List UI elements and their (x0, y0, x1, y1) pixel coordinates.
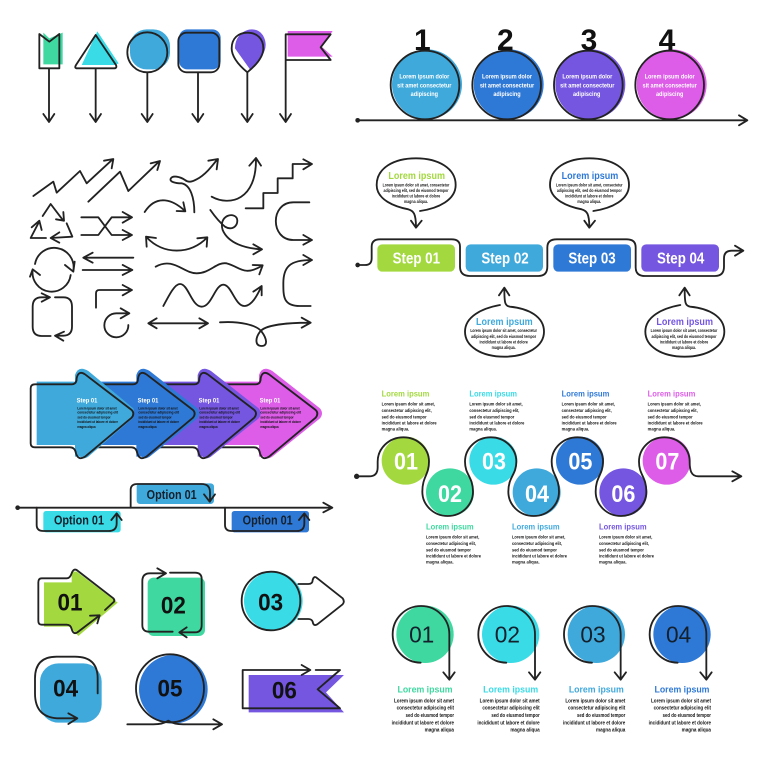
bubble: step 04: Lorem ipsum dolor sit amet, consectetur (651, 328, 718, 333)
badge 06 ribbon: 06 (272, 677, 297, 704)
item 4: sit amet consectetur (642, 82, 697, 89)
step 04 (641, 244, 719, 272)
badge 03 circle arrow (242, 572, 344, 630)
item 4 (635, 24, 707, 119)
item 03: 03 (580, 622, 606, 648)
arrow: recycle triangle (31, 204, 72, 243)
text 03: Lorem ipsum dolor sit amet, (469, 402, 523, 407)
arrow step texts: incididunt ut labore et dolore (138, 420, 179, 424)
bubble: step 02: Lorem ipsum (476, 317, 533, 328)
bubble: step 01 (377, 158, 456, 228)
item 1: sit amet consectetur (397, 82, 452, 89)
text 04: Lorem ipsum dolor sit amet, (512, 535, 565, 540)
bubble: step 03 (550, 158, 629, 228)
option bottom left (37, 508, 122, 532)
panel: snake timeline 01-07 (354, 390, 741, 565)
bubble: step 02: magna aliqua. (492, 345, 516, 350)
text 03: consectetur adipiscing elit, (469, 408, 519, 413)
arrow: zigzag one (33, 159, 113, 196)
text 01: sed do eiusmod tempor (382, 414, 427, 419)
arrow: opposite straight (83, 253, 133, 275)
arrow: circular (30, 248, 75, 292)
option bottom right: Option 01 (243, 512, 293, 527)
panel: step process with speech bubbles (355, 158, 743, 357)
bubble: step 02: Lorem ipsum dolor sit amet, consectetur (470, 328, 537, 333)
arrow step texts: magna aliqua (77, 425, 96, 429)
snake line (354, 437, 741, 516)
badge 03 circle arrow: 03 (258, 589, 283, 616)
item 02: magna aliqua (510, 727, 540, 733)
item 3: adipiscing (573, 91, 600, 98)
text 06: consectetur adipiscing elit, (599, 541, 649, 546)
badge 05 circle (127, 654, 222, 729)
badge 02 square (142, 568, 205, 637)
text 02: Lorem ipsum (426, 522, 474, 531)
arrow step texts: sed do eiusmod tempor (199, 415, 233, 419)
text 01: incididunt ut labore et dolore (382, 420, 437, 425)
arrow: square rotate (33, 293, 72, 341)
item 3: Lorem ipsum dolor (562, 73, 613, 80)
text 02: Lorem ipsum dolor sit amet, (426, 535, 479, 540)
arrow: double headed (148, 318, 208, 328)
text 06: Lorem ipsum (599, 522, 647, 531)
arrow step texts: consectetur adipiscing elit (260, 411, 302, 415)
arrow: circle return (104, 308, 129, 337)
panel: numbered circles timeline (355, 24, 747, 125)
arrow step texts: sed do eiusmod tempor (260, 415, 294, 419)
item 03: Lorem ipsum dolor sit amet (565, 698, 626, 704)
text 04: Lorem ipsum (512, 522, 560, 531)
text 01: consectetur adipiscing elit, (382, 408, 432, 413)
badge 05 circle: 05 (157, 676, 182, 703)
text 07: Lorem ipsum dolor sit amet, (648, 402, 701, 407)
text 05: consectetur adipiscing elit, (562, 408, 612, 413)
pin: rounded square (178, 29, 221, 122)
step 01: Step 01 (393, 250, 440, 267)
item 03: magna aliqua (596, 727, 625, 733)
item 02: 02 (495, 622, 520, 648)
pin: triangle (75, 31, 119, 122)
arrow: crossing (81, 212, 132, 240)
item 04: Lorem ipsum (654, 685, 709, 695)
item 01: Lorem ipsum (397, 685, 452, 695)
item 03: incididunt ut labore et dolore (563, 720, 625, 726)
text 02: sed do eiusmod tempor (426, 547, 471, 552)
item 2 (472, 24, 544, 119)
step 03 (553, 244, 631, 272)
arrow step texts: magna aliqua (199, 425, 218, 429)
text 07: sed do eiusmod tempor (648, 414, 693, 419)
step 03: Step 03 (568, 250, 616, 267)
text 03: Lorem ipsum (469, 390, 517, 399)
badge 01 arrow: 01 (57, 589, 82, 616)
bubble: step 04: adipiscing elit, sed do eiusmod tempor (651, 334, 717, 339)
arrow step texts: Step 01 (199, 399, 220, 405)
arrow: loop up (170, 159, 218, 212)
item 04 (649, 606, 712, 733)
pin: banner (39, 33, 63, 122)
item 01: Lorem ipsum dolor sit amet (394, 698, 454, 704)
step 01 (377, 244, 455, 272)
text 06: Lorem ipsum dolor sit amet, (599, 535, 652, 540)
item 01 (392, 606, 455, 733)
text 04: incididunt ut labore et dolore (512, 553, 567, 558)
text 03: magna aliqua. (469, 427, 497, 432)
option bottom left: Option 01 (54, 512, 104, 527)
arrow step 2 (98, 369, 199, 458)
arrow step texts: incididunt ut labore et dolore (77, 420, 118, 424)
bubble: step 04: Lorem ipsum (656, 317, 713, 328)
item 03: Lorem ipsum (569, 685, 624, 695)
item 03 (563, 606, 626, 733)
arrow: short curve (145, 200, 185, 212)
text 01: Lorem ipsum (382, 390, 429, 399)
panel: options timeline (15, 483, 332, 532)
item 2: adipiscing (493, 91, 521, 98)
text 07: Lorem ipsum (648, 390, 695, 399)
text 05: incididunt ut labore et dolore (562, 420, 617, 425)
arrow step texts: Step 01 (138, 399, 159, 405)
text 07 (648, 390, 703, 432)
text 02: consectetur adipiscing elit, (426, 541, 476, 546)
bubble: step 04 (645, 288, 724, 357)
badge 02 square: 02 (161, 593, 186, 620)
text 04: consectetur adipiscing elit, (512, 541, 562, 546)
item 3 (554, 24, 625, 119)
arrow: bend (96, 285, 132, 308)
step 02 (466, 244, 543, 272)
text 02: incididunt ut labore et dolore (426, 553, 481, 558)
item 02: sed do eiusmod tempor (491, 713, 540, 719)
pin: circle (127, 29, 170, 122)
panel: numbered circles with text (392, 606, 712, 733)
bubble: step 02: incididunt ut labore et dolore (479, 339, 528, 344)
bubble: step 01: Lorem ipsum (388, 171, 445, 182)
item 2: Lorem ipsum dolor (482, 73, 532, 80)
text 05 (562, 390, 617, 432)
circles with numbers: 06 (611, 481, 635, 508)
arrow step texts: consectetur adipiscing elit (199, 411, 241, 415)
item 03: consectetur adipiscing elit (568, 706, 626, 712)
arrow step texts: magna aliqua (138, 425, 157, 429)
badge 06 ribbon (243, 665, 344, 712)
text 07: consectetur adipiscing elit, (648, 408, 698, 413)
item 01: sed do eiusmod tempor (406, 713, 454, 719)
item 1: adipiscing (411, 91, 438, 98)
item 3: 3 (581, 24, 597, 57)
step connector line (355, 239, 743, 276)
pin: balloon (232, 29, 266, 122)
item 1: Lorem ipsum dolor (399, 73, 450, 80)
arrow step texts: Lorem ipsum dolor sit amet (199, 406, 239, 410)
arrow step texts: sed do eiusmod tempor (77, 415, 111, 419)
option top: Option 01 (147, 487, 197, 502)
arrow step texts: Lorem ipsum dolor sit amet (260, 406, 300, 410)
text 06 (599, 522, 654, 565)
arrow: loop right (210, 210, 262, 254)
option bottom right (225, 508, 309, 532)
arrow: stairs (246, 159, 312, 208)
circles with numbers (382, 437, 691, 516)
arrow step texts: magna aliqua (260, 425, 279, 429)
text 04: sed do eiusmod tempor (512, 547, 557, 552)
arrow: shallow wave (156, 263, 263, 274)
text 01: Lorem ipsum dolor sit amet, (382, 402, 435, 407)
circles with numbers: 01 (394, 448, 418, 475)
text 02 (426, 522, 481, 565)
arrow step texts: Step 01 (260, 399, 281, 405)
step 02: Step 02 (481, 250, 529, 267)
item 04: sed do eiusmod tempor (663, 713, 711, 719)
item 04: Lorem ipsum dolor sit amet (651, 698, 711, 704)
arrow step texts: Step 01 (77, 399, 98, 405)
arrow step 3 (159, 369, 261, 458)
text 05: Lorem ipsum (562, 390, 609, 399)
bubble: step 02: adipiscing elit, sed do eiusmod tempor (471, 334, 536, 339)
text 03: sed do eiusmod tempor (469, 414, 514, 419)
bubble: step 03: Lorem ipsum (562, 171, 618, 182)
text 07: incididunt ut labore et dolore (648, 420, 703, 425)
arrow step texts: sed do eiusmod tempor (138, 415, 172, 419)
step 04: Step 04 (657, 250, 705, 267)
arrow step texts: Lorem ipsum dolor sit amet (77, 406, 117, 410)
circles with numbers: 04 (525, 481, 550, 508)
arrow: C turn (276, 202, 312, 245)
circles with numbers: 03 (482, 448, 506, 475)
timeline axis (355, 115, 747, 125)
arrow step 4 (215, 369, 322, 458)
bubble: step 01: Lorem ipsum dolor sit amet, consectetur (383, 182, 450, 187)
panel: numbered badges (35, 568, 344, 729)
item 03: sed do eiusmod tempor (577, 713, 625, 719)
bubble: step 04: magna aliqua. (672, 345, 696, 350)
text 05: magna aliqua. (562, 427, 589, 432)
arrow: deep wave (163, 284, 262, 307)
bubble: step 02 (465, 288, 544, 357)
badge 04 rounded (35, 657, 102, 724)
axis (15, 503, 332, 512)
item 02 (477, 606, 540, 733)
arrow: reverse C (283, 255, 312, 306)
item 01: incididunt ut labore et dolore (392, 720, 454, 726)
option top (131, 483, 215, 508)
item 02: Lorem ipsum dolor sit amet (480, 698, 540, 704)
circles with numbers: 02 (438, 481, 462, 508)
arrow step texts: consectetur adipiscing elit (77, 411, 119, 415)
text 06: sed do eiusmod tempor (599, 547, 644, 552)
panel: map pins with arrows (39, 29, 333, 122)
text 04 (512, 522, 567, 565)
item 01: magna aliqua (425, 727, 454, 733)
item 04: incididunt ut labore et dolore (649, 720, 711, 726)
circles with numbers: 07 (655, 448, 679, 475)
item 2: 2 (497, 24, 514, 57)
bubble: step 03: magna aliqua. (577, 199, 601, 204)
item 04: 04 (666, 622, 691, 648)
badge 01 arrow (38, 570, 118, 636)
text 02: magna aliqua. (426, 560, 454, 565)
text 03 (469, 390, 525, 432)
item 01: consectetur adipiscing elit (397, 706, 454, 712)
circles with numbers: 05 (568, 448, 592, 475)
item 04: consectetur adipiscing elit (654, 706, 711, 712)
item 01: 01 (409, 622, 434, 648)
text 05: Lorem ipsum dolor sit amet, (562, 402, 615, 407)
arrow step texts: consectetur adipiscing elit (138, 411, 180, 415)
bubble: step 03: incididunt ut labore et dolore (565, 193, 614, 198)
bubble: step 01: incididunt ut labore et dolore (392, 193, 441, 198)
item 04: magna aliqua (682, 727, 711, 733)
item 02: Lorem ipsum (483, 685, 538, 695)
item 4: adipiscing (656, 91, 683, 98)
arrow: curve up (212, 158, 261, 201)
arrow step texts: incididunt ut labore et dolore (199, 420, 240, 424)
panel: overlapping arrow steps (31, 369, 322, 458)
arrow step texts: Lorem ipsum dolor sit amet (138, 406, 178, 410)
text 01: magna aliqua. (382, 427, 409, 432)
arrow step 1 (31, 369, 134, 458)
item 2: sit amet consectetur (480, 82, 534, 89)
item 4: 4 (659, 24, 676, 57)
text 06: incididunt ut labore et dolore (599, 553, 654, 558)
item 1 (391, 24, 462, 119)
badge 04 rounded: 04 (53, 676, 79, 703)
text 07: magna aliqua. (648, 427, 675, 432)
bubble: step 01: adipiscing elit, sed do eiusmod tempor (383, 188, 449, 193)
bubble: step 03: adipiscing elit, sed do eiusmod tempor (557, 188, 622, 193)
arrow step texts (77, 399, 302, 429)
arrow: bottom loop (220, 318, 311, 346)
panel: arrow collection (30, 158, 312, 346)
item 3: sit amet consectetur (560, 82, 615, 89)
arrow step texts: incididunt ut labore et dolore (260, 420, 301, 424)
bubble: step 01: magna aliqua. (404, 199, 428, 204)
text 05: sed do eiusmod tempor (562, 414, 607, 419)
item 02: consectetur adipiscing elit (482, 706, 540, 712)
item 02: incididunt ut labore et dolore (477, 720, 540, 726)
bubble: step 03: Lorem ipsum dolor sit amet, consectetur (556, 182, 623, 187)
text 03: incididunt ut labore et dolore (469, 420, 525, 425)
item 1: 1 (414, 24, 431, 57)
text 01 (382, 390, 437, 432)
pin: flag (280, 31, 333, 122)
item 4: Lorem ipsum dolor (645, 73, 695, 80)
text 06: magna aliqua. (599, 560, 627, 565)
arrow: zigzag two (88, 161, 160, 202)
text 04: magna aliqua. (512, 560, 540, 565)
arrow: double curved (146, 237, 207, 251)
bubble: step 04: incididunt ut labore et dolore (660, 339, 709, 344)
